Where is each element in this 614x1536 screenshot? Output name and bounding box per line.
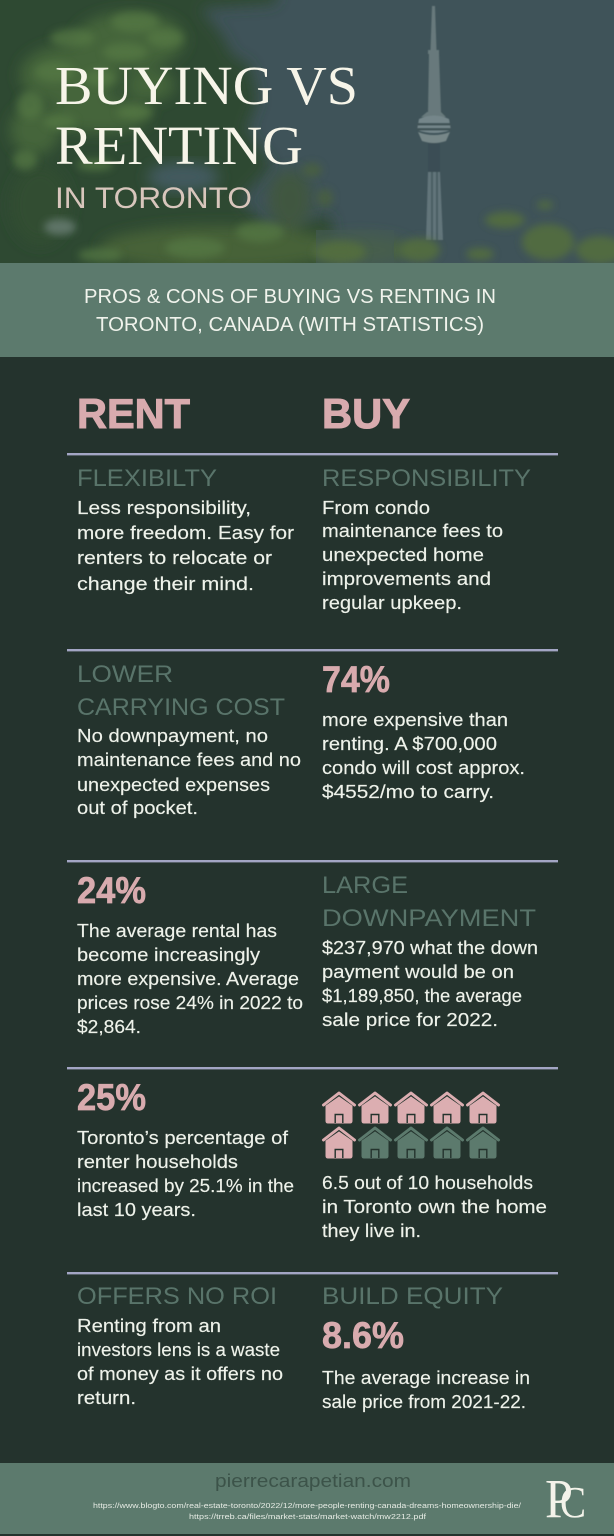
row 1 rent: flexibility: change their mind. — [77, 573, 254, 594]
row 5 buy: build equity: BUILD EQUITY — [322, 1283, 503, 1310]
row 4 rent: 25% statistic: 25% — [77, 1077, 146, 1118]
row 4 buy: house pictogram and ownership text: 6.5 out of 10 households — [322, 1172, 533, 1193]
row 1 rent: flexibility: renters to relocate or — [77, 547, 272, 568]
title: RENTING — [55, 115, 303, 176]
row 4 rent: 25% statistic: increased by 25.1% in the — [77, 1175, 294, 1196]
row 5 rent: offers no ROI: return. — [77, 1387, 136, 1408]
row 4 buy: house pictogram and ownership text: they live in. — [322, 1220, 421, 1241]
row 1 buy: responsibility: maintenance fees to — [322, 520, 503, 541]
row 1 rent: flexibility: Less responsibility, — [77, 497, 251, 518]
row 5 rent: offers no ROI: OFFERS NO ROI — [77, 1283, 277, 1310]
icon: ten houses, six pink and four green — [324, 1093, 498, 1158]
row 2 buy: 74% statistic: more expensive than — [322, 709, 508, 730]
row 3 buy: large downpayment: $237,970 what the down — [322, 937, 538, 958]
row 4 rent: 25% statistic: Toronto’s percentage of — [77, 1127, 289, 1148]
row 1 buy: responsibility: From condo — [322, 497, 430, 518]
row 5 buy: build equity: 8.6% — [322, 1315, 404, 1356]
row 3 rent: 24% statistic: $2,864. — [77, 1016, 141, 1037]
panel: subtitle banner — [0, 263, 614, 357]
row 1 buy: responsibility: improvements and — [322, 568, 491, 589]
source links: https://trreb.ca/files/market-stats/market-watch/mw2212.pdf — [189, 1512, 427, 1521]
row 2 rent: lower carrying cost: No downpayment, no — [77, 725, 268, 746]
row 2 rent: lower carrying cost: unexpected expenses — [77, 774, 270, 795]
heading: rent column: RENT — [77, 390, 190, 437]
row 1 buy: responsibility: regular upkeep. — [322, 592, 462, 613]
row 3 rent: 24% statistic: more expensive. Average — [77, 968, 299, 989]
source links: https://www.blogto.com/real-estate-toronto/2022/12/more-people-renting-canada-dreams-homeownership-die/ — [93, 1501, 522, 1510]
row 3 rent: 24% statistic: 24% — [77, 870, 146, 911]
logo: PC monogram: C — [560, 1478, 586, 1527]
row 2 buy: 74% statistic: condo will cost approx. — [322, 757, 525, 778]
icon: CN Tower — [417, 6, 451, 240]
title: BUYING VS — [55, 55, 358, 116]
heading: buy column: BUY — [322, 390, 410, 437]
row 5 rent: offers no ROI: Renting from an — [77, 1315, 221, 1336]
title — [55, 55, 358, 215]
website address: pierrecarapetian.com — [215, 1471, 411, 1491]
row 5 rent: offers no ROI: of money as it offers no — [77, 1363, 283, 1384]
panel: subtitle banner: TORONTO, CANADA (WITH STATISTICS) — [96, 314, 484, 336]
row 4 buy: house pictogram and ownership text: in Toronto own the home — [322, 1196, 547, 1217]
row 1 buy: responsibility: RESPONSIBILITY — [322, 465, 531, 492]
source links — [93, 1501, 522, 1521]
row 3 buy: large downpayment: payment would be on — [322, 961, 514, 982]
hero photo: trees and CN Tower — [0, 0, 614, 280]
row 5 buy: build equity: The average increase in — [322, 1367, 530, 1388]
row 3 buy: large downpayment: LARGE — [322, 872, 408, 899]
row 5 buy: build equity: sale price from 2021-22. — [322, 1391, 526, 1412]
row 2 buy: 74% statistic: renting. A $700,000 — [322, 733, 497, 754]
row 1 rent: flexibility: FLEXIBILTY — [77, 465, 217, 492]
row 1 rent: flexibility: more freedom. Easy for — [77, 522, 294, 543]
row 3 buy: large downpayment: DOWNPAYMENT — [322, 905, 536, 932]
row 3 buy: large downpayment — [322, 872, 538, 1030]
logo: PC monogram: P — [545, 1468, 573, 1529]
row 3 rent: 24% statistic: The average rental has — [77, 920, 277, 941]
row 2 rent: lower carrying cost: out of pocket. — [77, 797, 198, 818]
row 5 rent: offers no ROI: investors lens is a waste — [77, 1339, 280, 1360]
row 4 rent: 25% statistic — [77, 1077, 294, 1220]
row 2 rent: lower carrying cost: CARRYING COST — [77, 694, 285, 721]
row 1 rent: flexibility — [77, 465, 294, 594]
foreground foliage — [302, 163, 614, 264]
row 2 buy: 74% statistic: 74% — [322, 659, 390, 700]
panel: subtitle banner: PROS & CONS OF BUYING VS RENTING IN — [84, 286, 496, 308]
row 3 rent: 24% statistic — [77, 870, 303, 1037]
row 2 rent: lower carrying cost: LOWER — [77, 661, 173, 688]
row 3 buy: large downpayment: sale price for 2022. — [322, 1009, 498, 1030]
panel: footer — [0, 1463, 614, 1534]
row 2 rent: lower carrying cost: maintenance fees and no — [77, 749, 301, 770]
row 4 rent: 25% statistic: renter households — [77, 1151, 238, 1172]
row 2 rent: lower carrying cost — [77, 661, 301, 818]
row 3 rent: 24% statistic: prices rose 24% in 2022 to — [77, 992, 303, 1013]
row 2 buy: 74% statistic: $4552/mo to carry. — [322, 781, 494, 802]
row 2 buy: 74% statistic — [322, 659, 525, 802]
title: IN TORONTO — [55, 182, 252, 215]
row 3 rent: 24% statistic: become increasingly — [77, 944, 261, 965]
row 4 rent: 25% statistic: last 10 years. — [77, 1199, 196, 1220]
row 3 buy: large downpayment: $1,189,850, the average — [322, 985, 522, 1006]
tree canopy — [0, 0, 410, 280]
row 1 buy: responsibility — [322, 465, 531, 613]
row 4 buy: house pictogram and ownership text — [322, 1093, 547, 1241]
row 1 buy: responsibility: unexpected home — [322, 544, 484, 565]
row 5 rent: offers no ROI — [77, 1283, 283, 1408]
row 5 buy: build equity — [322, 1283, 530, 1412]
